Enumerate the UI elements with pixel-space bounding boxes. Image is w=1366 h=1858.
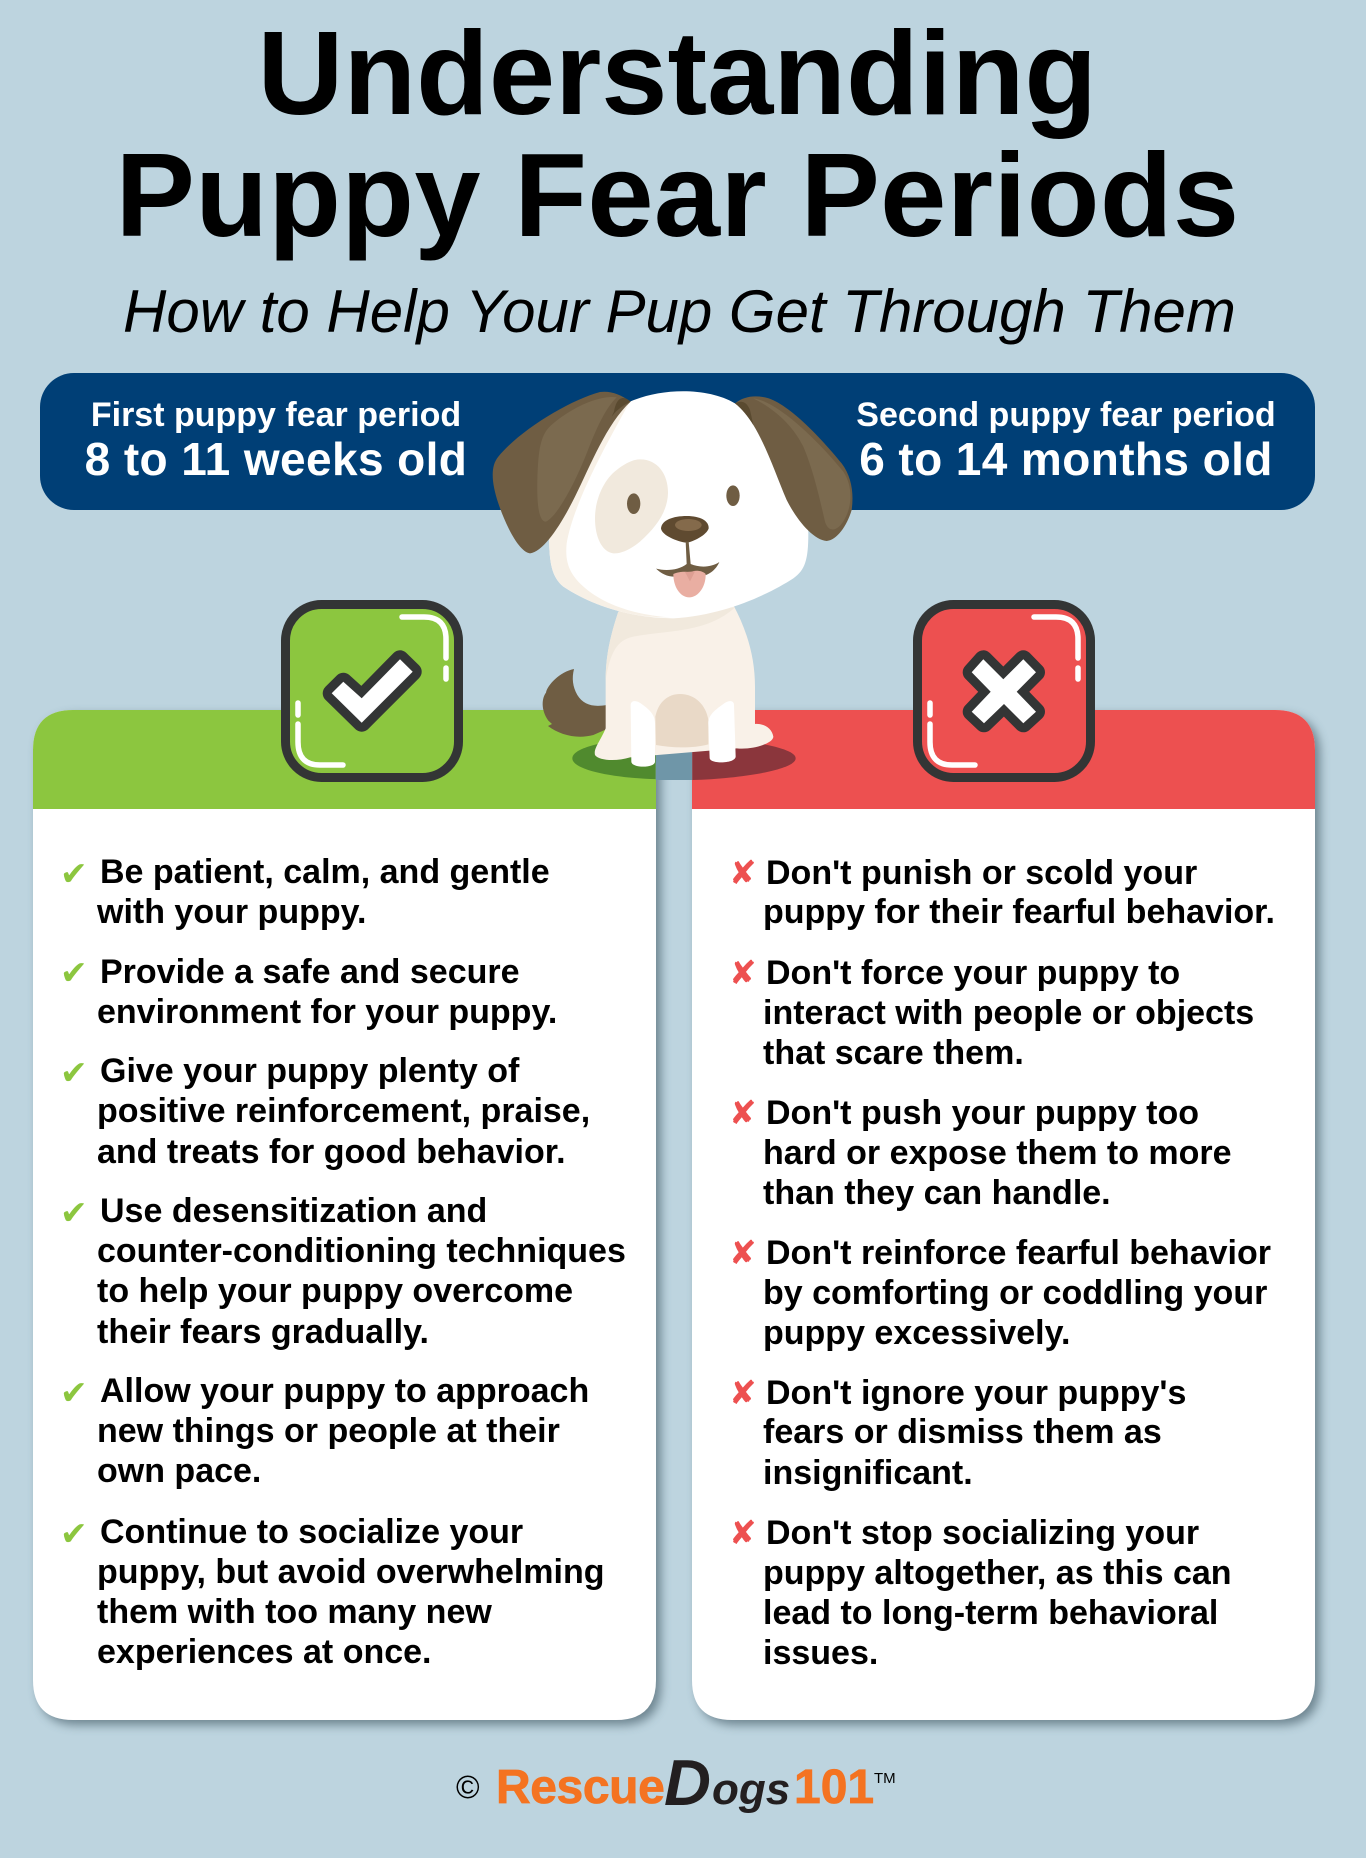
item: hard or expose them to more	[763, 1134, 1232, 1172]
item: positive reinforcement, praise,	[97, 1092, 590, 1130]
nose	[661, 516, 709, 543]
banner: fear period ages	[40, 373, 1315, 510]
item: issues.	[763, 1634, 878, 1672]
item: insignificant.	[763, 1454, 973, 1492]
item: Don't stop socializing your	[766, 1514, 1199, 1552]
item: lead to long-term behavioral	[763, 1594, 1218, 1632]
item: fears or dismiss them as	[763, 1413, 1162, 1451]
item: ✘	[729, 1373, 757, 1412]
logo: RescueDogs101: ©	[456, 1769, 480, 1805]
item: that scare them.	[763, 1034, 1024, 1072]
tongue	[673, 571, 706, 597]
item: ✘	[729, 853, 757, 892]
item	[729, 1093, 1232, 1212]
title	[116, 7, 1239, 262]
ground shadow	[572, 737, 796, 780]
item: puppy altogether, as this can	[763, 1554, 1232, 1592]
item: experiences at once.	[97, 1633, 432, 1671]
item	[729, 1373, 1186, 1492]
item: Don't ignore your puppy's	[766, 1374, 1186, 1412]
item	[60, 1192, 626, 1351]
second fear period label: 6 to 14 months old	[859, 433, 1273, 485]
panel header: red	[692, 710, 1315, 809]
item: ✔	[60, 1514, 88, 1553]
icon: red cross badge	[918, 604, 1090, 778]
item: Don't force your puppy to	[766, 954, 1180, 992]
item: to help your puppy overcome	[97, 1272, 573, 1310]
item: ✘	[729, 953, 757, 992]
item: ✔	[60, 1193, 88, 1232]
item: Allow your puppy to approach	[100, 1372, 589, 1410]
illustration: puppy	[493, 391, 852, 780]
item	[729, 1233, 1271, 1352]
mouth	[656, 542, 719, 577]
item	[729, 1513, 1232, 1672]
item	[729, 953, 1254, 1072]
tail	[543, 669, 608, 737]
don't items	[729, 853, 1275, 1672]
item: puppy, but avoid overwhelming	[97, 1553, 605, 1591]
item: own pace.	[97, 1452, 261, 1490]
first fear period label: First puppy fear period	[91, 396, 461, 434]
item	[60, 1513, 605, 1671]
item: counter-conditioning techniques	[97, 1232, 626, 1270]
logo: RescueDogs101: ogs	[712, 1765, 790, 1814]
icon: green check badge	[286, 604, 458, 778]
item	[60, 853, 550, 931]
front legs	[631, 701, 655, 767]
logo: RescueDogs101: Rescue	[496, 1761, 664, 1814]
item: ✔	[60, 1053, 88, 1092]
belly	[655, 694, 708, 747]
item: puppy for their fearful behavior.	[763, 893, 1275, 931]
item: environment for your puppy.	[97, 993, 557, 1031]
item: Give your puppy plenty of	[100, 1052, 520, 1090]
item: puppy excessively.	[763, 1314, 1070, 1352]
item: them with too many new	[97, 1593, 492, 1631]
item	[729, 853, 1275, 931]
second fear period label	[856, 396, 1276, 485]
left ear	[493, 392, 631, 553]
title: Puppy Fear Periods	[116, 129, 1239, 262]
body	[595, 605, 773, 767]
eye patch	[595, 459, 668, 553]
head	[549, 391, 808, 618]
item: ✘	[729, 1233, 757, 1272]
panel: do list	[33, 710, 661, 1725]
item: new things or people at their	[97, 1412, 560, 1450]
logo: RescueDogs101: TM	[874, 1770, 896, 1787]
item: and treats for good behavior.	[97, 1133, 566, 1171]
logo: RescueDogs101: D	[664, 1746, 711, 1819]
item: interact with people or objects	[763, 994, 1254, 1032]
item: with your puppy.	[96, 893, 366, 931]
panel header: green	[33, 710, 656, 809]
item: Don't push your puppy too	[766, 1094, 1199, 1132]
item: than they can handle.	[763, 1174, 1111, 1212]
item: Don't punish or scold your	[766, 854, 1197, 892]
item: ✘	[729, 1513, 757, 1552]
item: Be patient, calm, and gentle	[100, 853, 550, 891]
right ear	[735, 396, 852, 541]
item	[60, 1052, 590, 1171]
item: ✔	[60, 854, 88, 893]
item: ✔	[60, 953, 88, 992]
item: Continue to socialize your	[100, 1513, 523, 1551]
item: by comforting or coddling your	[763, 1274, 1267, 1312]
logo: RescueDogs101: 101	[794, 1761, 874, 1814]
second fear period label: Second puppy fear period	[856, 396, 1276, 434]
subtitle: How to Help Your Pup Get Through Them	[123, 278, 1236, 345]
item: ✔	[60, 1373, 88, 1412]
eyes	[627, 493, 640, 514]
item: Use desensitization and	[100, 1192, 487, 1230]
title: Understanding	[258, 7, 1097, 140]
first fear period label	[85, 396, 467, 485]
item: ✘	[729, 1093, 757, 1132]
item: Don't reinforce fearful behavior	[766, 1234, 1271, 1272]
item	[60, 1372, 589, 1490]
item: their fears gradually.	[97, 1313, 429, 1351]
item: Provide a safe and secure	[100, 953, 520, 991]
do items	[60, 853, 626, 1671]
item	[60, 953, 557, 1031]
logo: RescueDogs101	[456, 1746, 896, 1819]
panel: don't list	[692, 710, 1320, 1725]
first fear period label: 8 to 11 weeks old	[85, 433, 467, 485]
